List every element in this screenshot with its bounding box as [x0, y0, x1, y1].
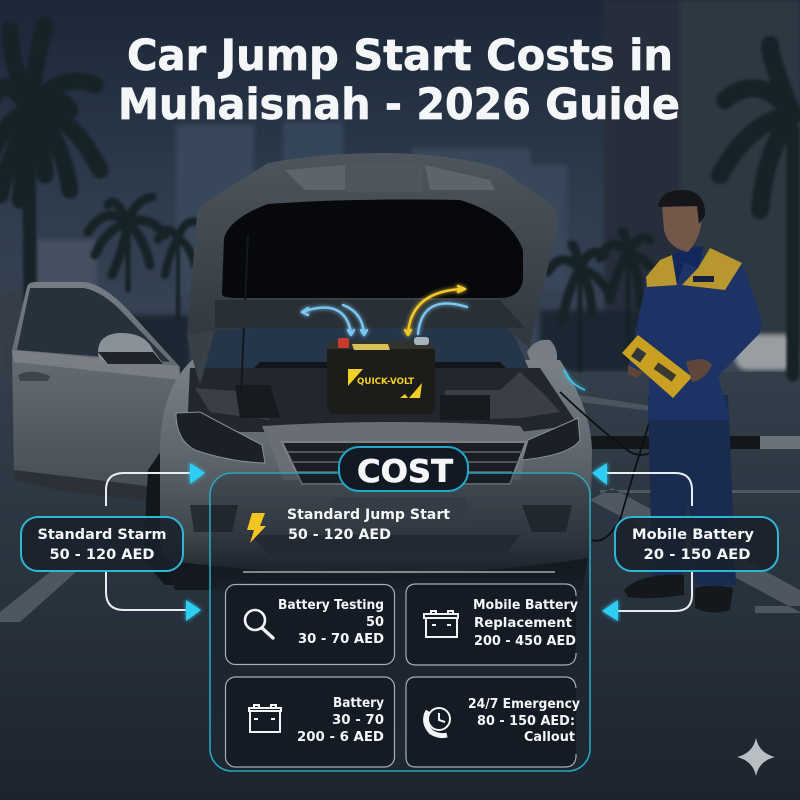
24/7 emergency text: 80 - 150 AED: — [477, 714, 575, 729]
icon: battery — [424, 611, 458, 637]
yellow arrow — [405, 286, 465, 335]
icon: sparkle watermark — [737, 738, 775, 776]
windshield — [195, 325, 530, 372]
card: battery testing — [226, 584, 394, 664]
24/7 emergency text: 24/7 Emergency — [468, 697, 580, 712]
icon: phone with clock — [426, 708, 450, 736]
battery text — [297, 696, 384, 745]
24/7 emergency text — [468, 697, 580, 745]
battery text: Battery — [333, 696, 384, 711]
headlights — [176, 412, 265, 463]
technician with jump starter — [622, 190, 762, 613]
callout: mobile battery: Mobile Battery — [632, 527, 754, 543]
open car door — [12, 282, 180, 505]
card: 24/7 emergency — [406, 677, 580, 767]
card: mobile battery replacement — [406, 584, 579, 665]
battery testing text: 50 — [366, 615, 384, 630]
grille — [282, 442, 526, 484]
callout: mobile battery — [615, 517, 778, 571]
battery logo — [348, 369, 422, 398]
engine bay — [188, 368, 578, 432]
title — [118, 31, 680, 130]
yellow yoke — [646, 248, 742, 290]
cost pill heading: COST — [357, 454, 453, 490]
far side mirror — [527, 340, 557, 360]
torso and arms — [628, 250, 762, 420]
cost pill heading — [339, 447, 468, 491]
standard jump start price — [287, 507, 450, 543]
callout: standard start: Standard Starm — [38, 527, 166, 543]
mobile battery replacement text: Mobile Battery — [473, 598, 579, 613]
battery testing text: 30 - 70 AED — [298, 632, 384, 647]
blue arrows — [302, 303, 467, 335]
card: battery — [226, 677, 394, 767]
open hood — [187, 153, 558, 395]
battery with jump arrows: QUICK-VOLT — [357, 377, 415, 387]
legs — [648, 395, 736, 585]
standard jump start price: 50 - 120 AED — [288, 527, 391, 543]
panel: cost — [210, 447, 590, 771]
standard jump start price: Standard Jump Start — [287, 507, 450, 523]
palm trees — [0, 25, 793, 375]
mobile battery replacement text — [473, 598, 579, 649]
divider — [243, 571, 555, 573]
battery with jump arrows — [302, 286, 585, 414]
plate and fog lamps — [332, 497, 467, 527]
icon: magnifier — [245, 610, 273, 638]
title: Muhaisnah - 2026 Guide — [118, 80, 680, 130]
battery testing text: Battery Testing — [278, 598, 384, 613]
battery testing text — [278, 598, 384, 647]
callout: standard start: 50 - 120 AED — [50, 547, 154, 563]
head — [662, 205, 702, 252]
title: Car Jump Start Costs in — [127, 31, 673, 81]
icon: battery — [249, 705, 281, 732]
left connector arrows — [106, 463, 205, 621]
mobile battery replacement text: 200 - 450 AED — [474, 634, 576, 649]
mobile battery replacement text: Replacement — [474, 616, 572, 631]
jump cable — [560, 390, 680, 541]
callout: standard start — [21, 517, 183, 571]
jump starter device — [622, 335, 692, 398]
hood lip — [262, 422, 530, 480]
right connector arrows — [592, 463, 692, 621]
battery case — [327, 349, 435, 414]
callout: mobile battery: 20 - 150 AED — [644, 547, 750, 563]
icon: lightning bolt — [247, 513, 266, 543]
car body and front — [143, 325, 592, 590]
24/7 emergency text: Callout — [524, 730, 575, 745]
battery text: 200 - 6 AED — [297, 730, 384, 745]
battery text: 30 - 70 — [332, 713, 384, 728]
hands — [686, 359, 712, 382]
